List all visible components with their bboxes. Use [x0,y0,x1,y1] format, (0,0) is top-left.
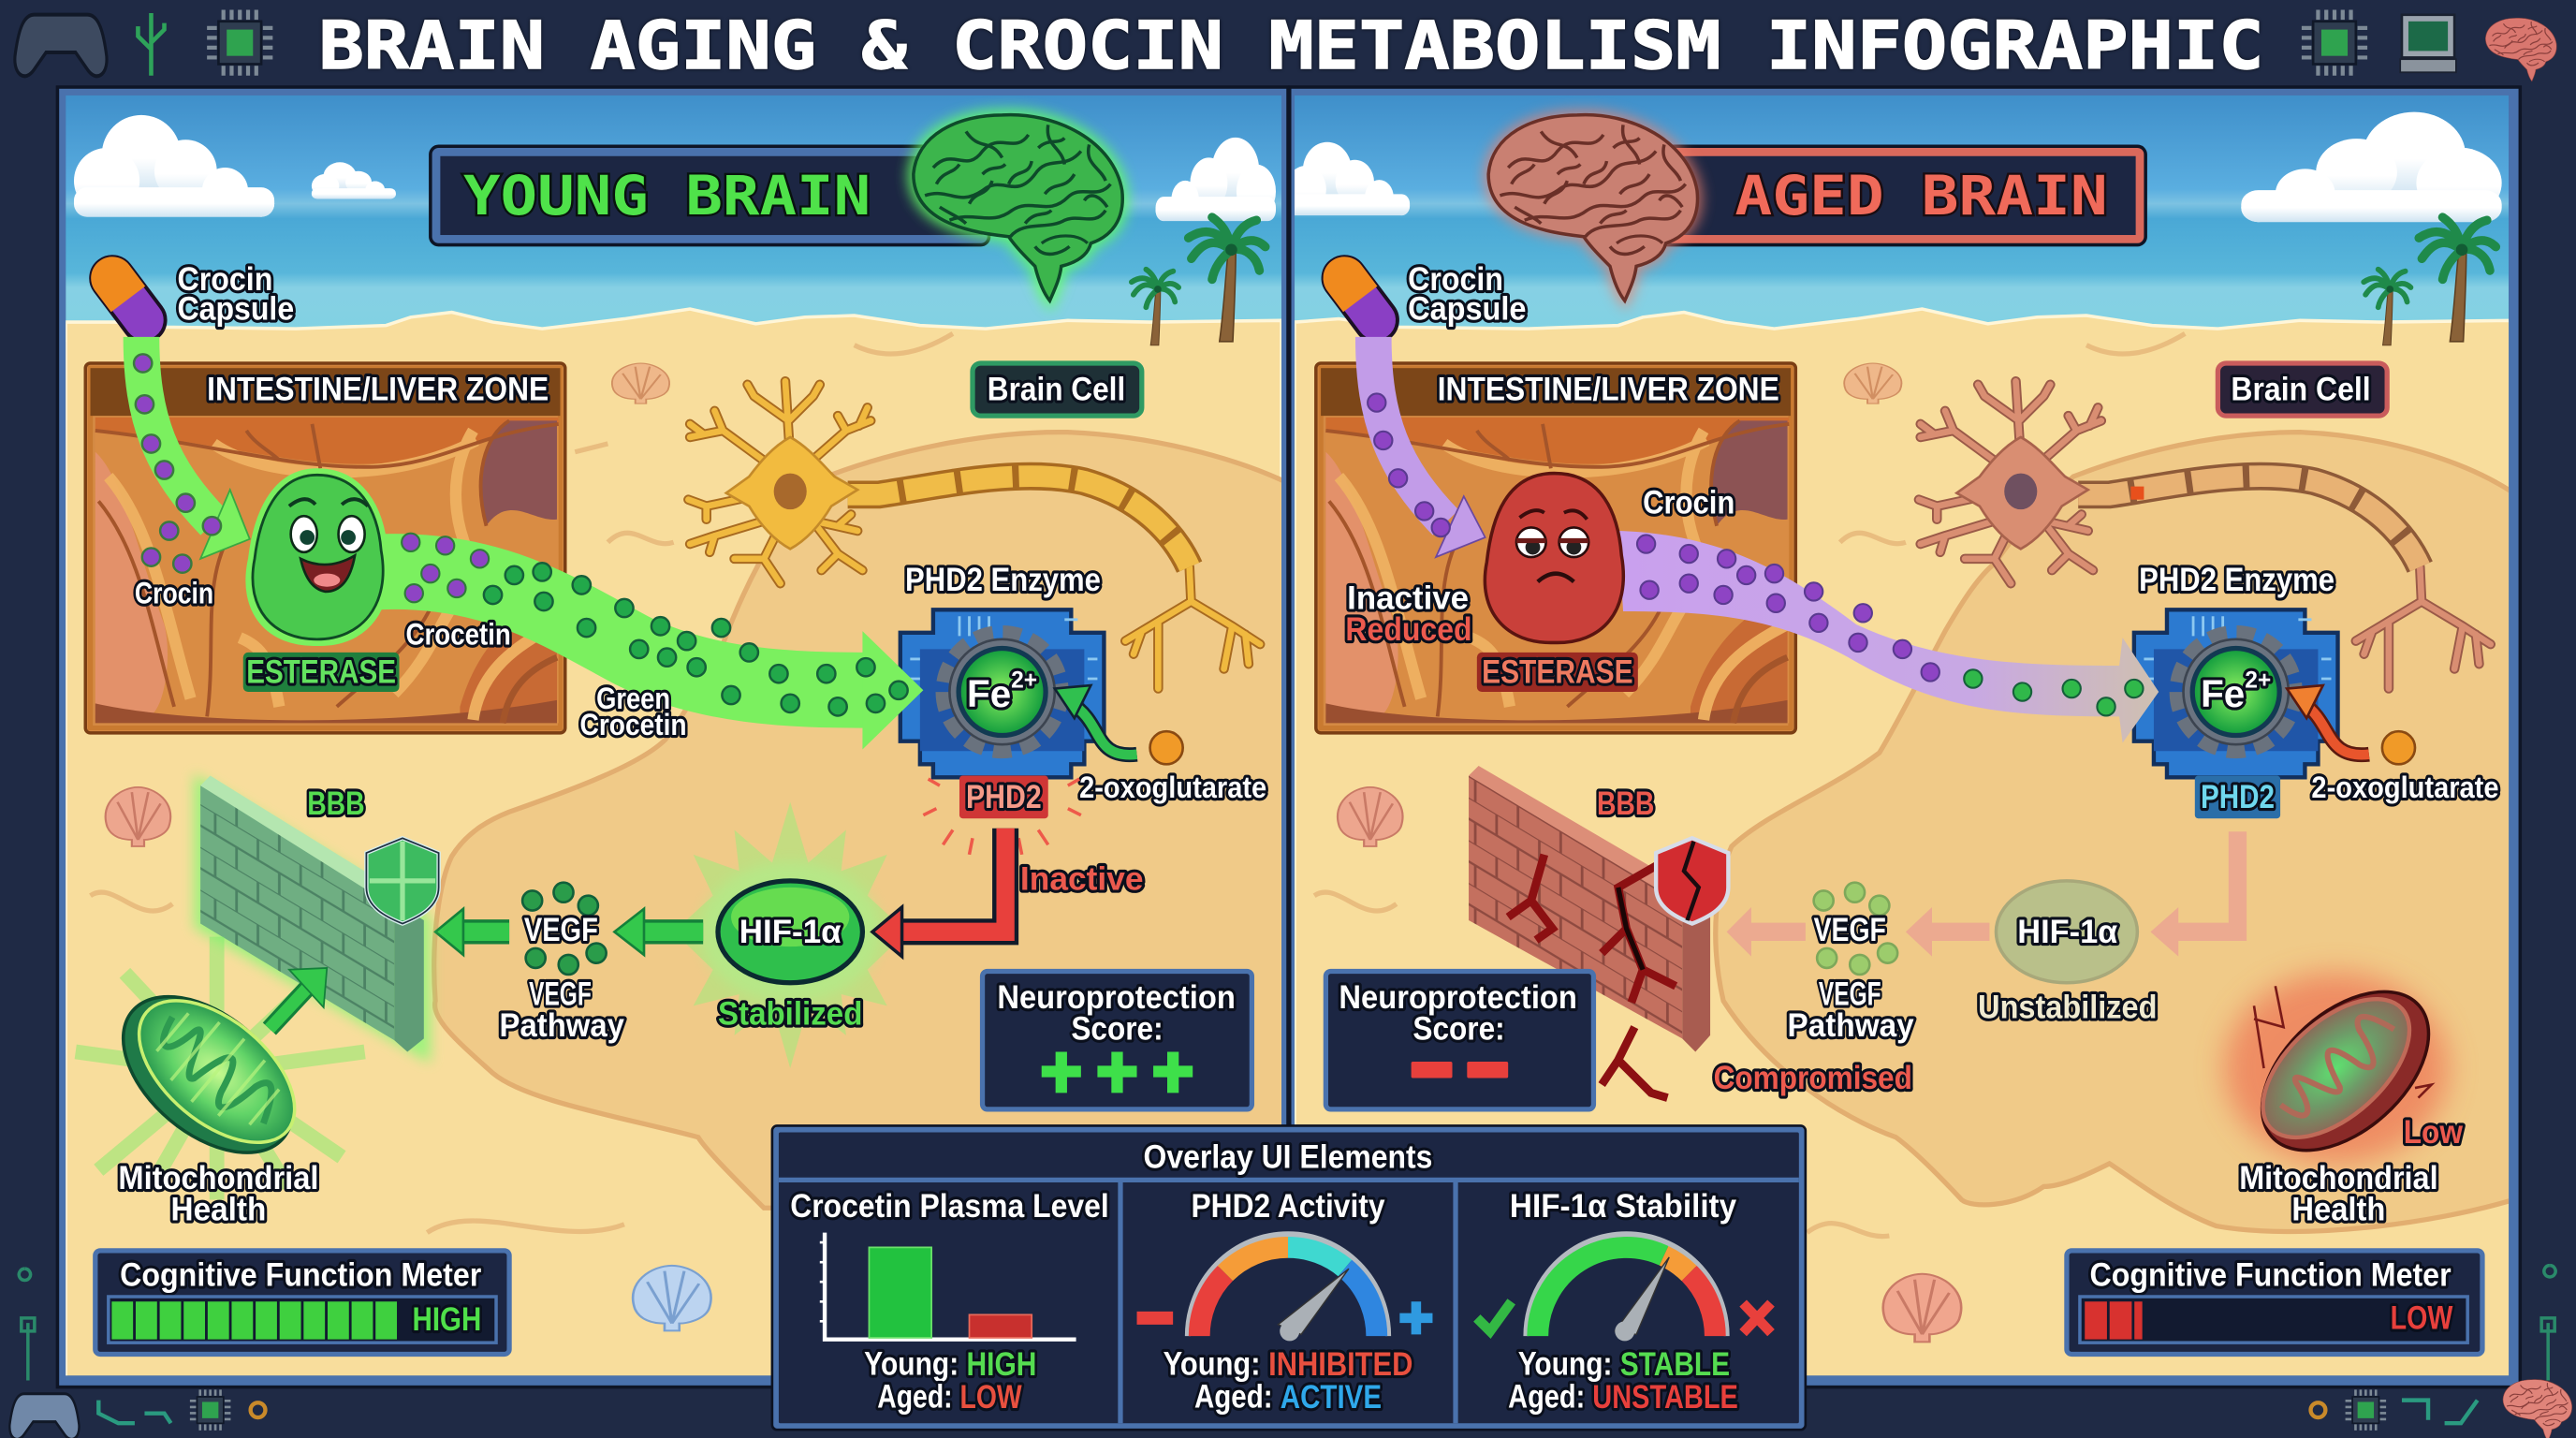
mitochondrial rays [76,937,365,1199]
capsule [1314,248,1406,350]
capsule [82,248,174,350]
icon: computer [2400,15,2456,72]
zone title: INTESTINE/LIVER ZONE [207,372,549,408]
palms [1132,217,1266,345]
label: crocetin: Crocetin [406,618,511,652]
neuron young [688,381,1260,689]
column: crocetin plasma level [790,1188,1109,1416]
cracks [1508,855,1676,1098]
flow ribbon aged [1618,531,2159,742]
score label [1339,979,1577,1047]
score label: Score: [1071,1010,1164,1047]
label: crocin capsule: Crocin [1408,261,1503,298]
readout: Aged: LOW [877,1379,1022,1416]
flow arrow: capsule to esterase aged [1368,337,1486,557]
heading: AGED BRAIN [1734,164,2108,227]
shells [106,363,711,1330]
bottom bar icons right [2311,1380,2572,1438]
label: crocin capsule: Capsule [1408,291,1526,328]
arrow: hif to vegf faded [1906,907,1989,957]
label: mitochondrial health: Mitochondrial [2239,1160,2438,1196]
gauge [1188,1234,1388,1341]
character: esterase red [1485,474,1623,642]
label: stabilized: Stabilized [718,996,862,1033]
tag: brain cell [973,363,1142,416]
enzyme device [900,609,1104,777]
tag: brain cell aged [2217,363,2387,416]
column: hif-1a stability: HIF-1α Stability [1510,1188,1737,1225]
column: hif-1a stability [1477,1188,1771,1416]
readout: Young: INHIBITED [1164,1346,1412,1383]
label: mitochondrial health [118,1160,318,1227]
icon: ring [251,1402,265,1417]
arrow: faded path to hif [2150,831,2237,957]
sand [66,309,1281,1381]
icon: mitochondrion green [95,966,321,1183]
bar chart [820,1233,1076,1340]
side decoration left [19,1269,35,1381]
meter title: Cognitive Function Meter [2089,1257,2452,1294]
scene background [66,95,1284,1381]
label: crocin capsule [1408,261,1526,328]
panel: intestine zone aged [1316,363,1795,733]
crocin dots on ribbon [1637,535,1939,682]
label: 2-oxoglutarate: 2-oxoglutarate [2311,770,2499,804]
label: 2-oxoglutarate: 2-oxoglutarate [1079,770,1266,804]
scene background [1285,95,2513,1381]
bbb wall green [200,776,424,1051]
label: green crocetin [580,682,687,741]
fe label: Fe [2201,672,2245,715]
label: crocin capsule: Crocin [178,261,272,298]
zone title: INTESTINE/LIVER ZONE [1438,372,1779,408]
label: vegf pathway [1788,976,1914,1044]
fe label: 2+ [2245,668,2271,693]
label: crocin aged: Crocin [1643,485,1734,521]
icon: broken shield [1656,838,1728,924]
readout: Young: STABLE [1518,1346,1730,1383]
crocetin dots on ribbon [484,563,908,715]
banner: young brain [431,146,989,245]
title: BRAIN AGING & CROCIN METABOLISM INFOGRAPHIC [318,7,2264,84]
readout [1164,1346,1412,1416]
flow arrow: capsule to esterase [134,337,250,573]
orange molecule [1150,731,1183,764]
meter value: LOW [2391,1299,2453,1336]
icon: green brain [914,115,1122,301]
label: bbb aged: BBB [1597,785,1654,822]
icon: ring [2311,1402,2325,1417]
clouds right [1285,112,2502,222]
label: bbb: BBB [307,785,365,822]
tag: brain cell: Brain Cell [988,372,1125,408]
overlay title: Overlay UI Elements [1144,1138,1432,1175]
score label: Score: [1412,1010,1505,1047]
flow arrow: crocetin ribbon [378,534,923,749]
tag: esterase red: ESTERASE [1482,653,1633,690]
fe label: Fe [967,672,1011,715]
panel: neuroprotection score [983,971,1251,1109]
icon: green shield [366,838,439,924]
vegf cluster faded [1814,883,1897,975]
label: phd2 enzyme: PHD2 Enzyme [905,562,1101,598]
icon: gamepad [15,15,107,76]
readout: Aged: ACTIVE [1194,1379,1382,1416]
check icon [1477,1301,1512,1331]
side decoration right [2541,1266,2555,1381]
arrow: mito to wall [270,968,327,1029]
panel: overlay ui elements [772,1125,1806,1430]
plus icons [1042,1051,1193,1093]
tag: phd2 red [923,776,1081,855]
column: phd2 activity [1137,1188,1432,1416]
banner: aged brain [1660,146,2145,245]
label: inactive: Inactive [1020,861,1144,898]
label: green crocetin: Crocetin [580,708,687,741]
minus icon [1137,1312,1173,1325]
readout: Young: HIGH [864,1346,1036,1383]
dark sand blob [1716,433,2513,1232]
label: mitochondrial health: Mitochondrial [118,1160,318,1196]
label: vegf pathway: VEGF [529,976,592,1013]
score label: Neuroprotection [1339,979,1577,1016]
heading: YOUNG BRAIN [463,164,871,227]
vegf cluster: VEGF [524,912,598,948]
top bar icons left [15,10,272,76]
plus icon [1399,1301,1432,1334]
column: crocetin plasma level: Crocetin Plasma Level [790,1188,1109,1225]
arrow: red inhibition [872,829,1005,957]
bbb wall cracked [1469,766,1710,1098]
circuit trace [2402,1401,2478,1423]
label: low: Low [2404,1114,2464,1151]
frame [57,87,1288,1387]
column: phd2 activity: PHD2 Activity [1191,1188,1385,1225]
panel: young brain [57,87,1288,1387]
icon: chip [190,1389,230,1431]
shells [1338,363,1961,1342]
arrow: hif to vegf [614,909,703,955]
panel: neuroprotection score aged [1325,971,1593,1109]
hif text: HIF-1α [2017,914,2118,950]
label: inactive reduced: Inactive [1347,580,1469,616]
arrow: 2-oxoglutarate green [1055,685,1137,755]
gauge [1526,1234,1727,1341]
label: mitochondrial health [2239,1160,2438,1227]
label: inactive reduced: Reduced [1345,611,1472,648]
crocetin dots on ribbon [1964,669,2144,715]
vegf cluster [522,883,607,975]
neuron aged [1919,381,2491,689]
hif-1a unstabilized [1996,881,2137,983]
icon: chip right [2302,10,2367,76]
icon: brain [2503,1380,2572,1438]
panel: aged brain [1285,87,2520,1387]
meter segments [2085,1310,2143,1331]
orange molecule [2382,731,2415,764]
fe label: 2+ [1011,668,1037,693]
top bar icons right [2302,10,2556,81]
label: green crocetin: Green [596,682,670,715]
hif-1a stabilized [674,802,907,1068]
meter value: HIGH [413,1301,481,1338]
dark sand blob [434,433,1284,1208]
minus icons [1412,1062,1508,1078]
icon: chip [207,10,272,76]
icon: gamepad [9,1394,79,1438]
label: inactive reduced [1345,580,1472,648]
readout [864,1346,1036,1416]
crocin dots on ribbon [402,534,489,602]
circuit trace [98,1401,171,1423]
tag: brain cell aged: Brain Cell [2231,372,2371,408]
meter segments [111,1310,399,1331]
tag: esterase: ESTERASE [246,653,396,690]
label: unstabilized: Unstabilized [1978,990,2157,1026]
icon: brain top right [2485,18,2556,81]
arrow: vegf to bbb [435,909,509,955]
icon: usb [138,13,165,76]
icon: mitochondrion damaged [2224,961,2458,1181]
vegf cluster faded: VEGF [1814,912,1886,948]
arrow: 2-oxoglutarate orange [2287,685,2369,755]
character: esterase green [249,472,387,642]
label: vegf pathway: Pathway [500,1007,624,1044]
enzyme device aged [2134,609,2338,777]
tag: phd2 red: PHD2 [966,779,1042,815]
palms [2364,217,2496,345]
icon: aged brain [1488,115,1698,301]
readout [1508,1346,1738,1416]
label: compromised: Compromised [1714,1060,1912,1096]
x icon [1743,1303,1771,1333]
crocin dots [134,354,221,573]
clouds left [74,115,1276,221]
meter title: Cognitive Function Meter [120,1257,482,1294]
hif text: HIF-1α [739,914,842,950]
bottom bar icons left [9,1389,265,1438]
label: vegf pathway [500,976,624,1044]
label: vegf pathway: VEGF [1819,976,1881,1013]
sand ripples [1314,333,2185,1237]
arrow: vegf to bbb faded [1727,907,1806,957]
label: crocin capsule [178,261,294,328]
label: crocin: Crocin [135,577,213,610]
readout: Aged: UNSTABLE [1508,1379,1738,1416]
sand ripples [91,333,953,1233]
tag: phd2 blue: PHD2 [2201,779,2275,815]
sand [1295,309,2510,1381]
label: vegf pathway: Pathway [1788,1007,1914,1044]
label: crocin capsule: Capsule [178,291,294,328]
panel: intestine zone [85,363,565,733]
score label [997,979,1236,1047]
frame [1290,87,2520,1387]
label: phd2 enzyme aged: PHD2 Enzyme [2139,562,2334,598]
label: mitochondrial health: Health [2291,1191,2385,1227]
panel: cognitive meter young [95,1251,509,1354]
panel: cognitive meter aged [2067,1251,2482,1354]
label: mitochondrial health: Health [171,1191,266,1227]
score label: Neuroprotection [997,979,1236,1016]
icon: chip [2346,1389,2386,1431]
crocin dots [1368,393,1450,536]
